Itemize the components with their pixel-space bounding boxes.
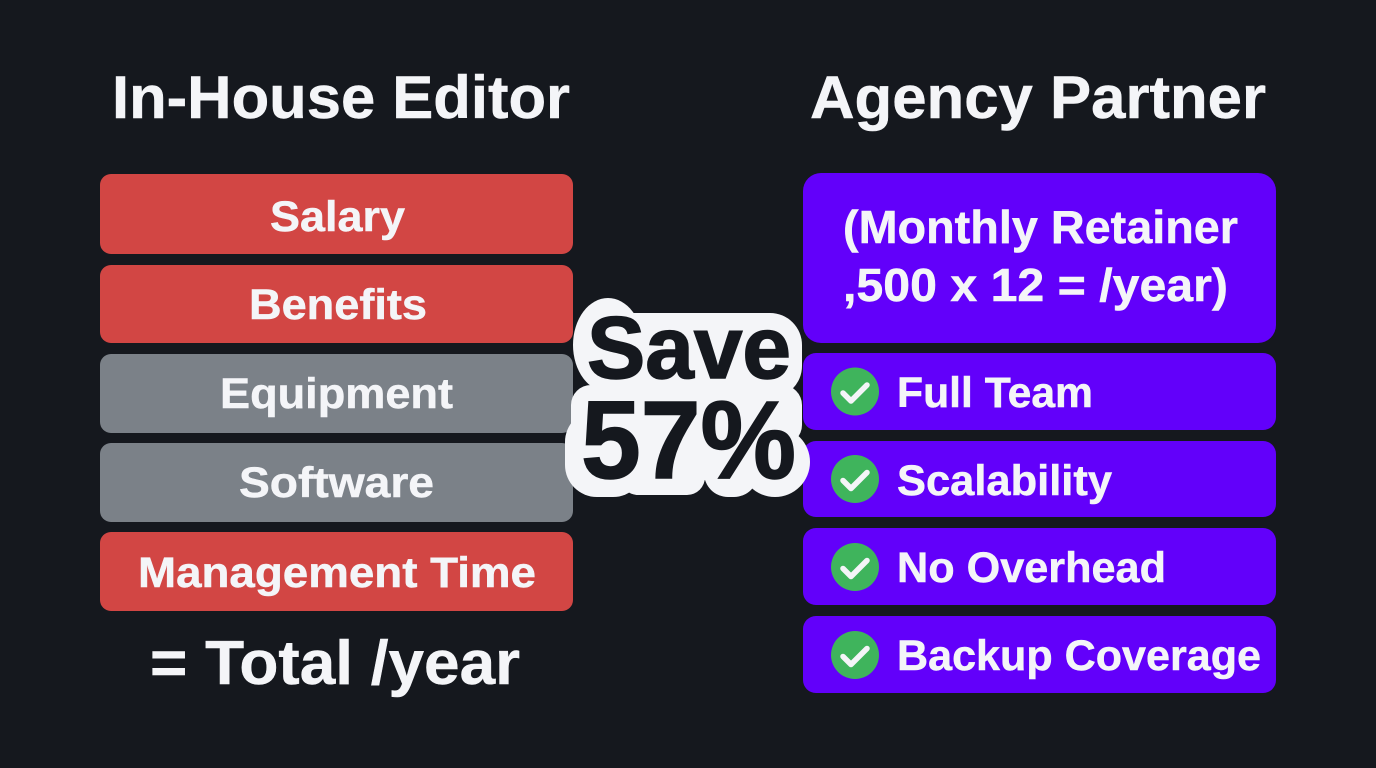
heading: In-House Editor: In-House Editor bbox=[112, 64, 570, 131]
cost bar: Equipment bbox=[100, 354, 573, 433]
cost bar: Software bbox=[100, 443, 573, 522]
cost bar: Management Time: Management Time bbox=[138, 549, 536, 597]
benefit bar: No Overhead: No Overhead bbox=[897, 544, 1166, 592]
benefit bar: Backup Coverage: Backup Coverage bbox=[897, 632, 1261, 680]
benefit bar: No Overhead bbox=[803, 528, 1276, 605]
icon: check bbox=[831, 631, 879, 679]
retainer box: ,500 x 12 = /year) bbox=[843, 259, 1228, 311]
retainer box: (Monthly Retainer bbox=[843, 201, 1238, 253]
sticker backing bbox=[565, 298, 810, 497]
cost bar: Salary bbox=[100, 174, 573, 254]
callout: Save 57% sticker bbox=[565, 298, 810, 502]
benefit bar: Full Team bbox=[803, 353, 1276, 430]
panel: in-house cost list bbox=[100, 174, 573, 611]
cost bar: Salary: Salary bbox=[270, 193, 405, 241]
benefit bar: Full Team: Full Team bbox=[897, 369, 1093, 417]
sticker text: Save: Save bbox=[587, 298, 791, 397]
icon: check bbox=[831, 455, 879, 503]
heading: Agency Partner: Agency Partner bbox=[810, 64, 1266, 131]
cost bar: Benefits bbox=[100, 265, 573, 343]
cost bar: Benefits: Benefits bbox=[249, 281, 427, 329]
benefit bar: Backup Coverage bbox=[803, 616, 1276, 693]
panel: agency partner list bbox=[803, 173, 1276, 693]
cost bar: Equipment: Equipment bbox=[220, 370, 453, 418]
icon: check bbox=[831, 543, 879, 591]
cost bar: Software: Software bbox=[239, 459, 434, 507]
icon: check bbox=[831, 368, 879, 416]
benefit bar: Scalability: Scalability bbox=[897, 457, 1112, 505]
benefit bar: Scalability bbox=[803, 441, 1276, 517]
retainer box bbox=[803, 173, 1276, 343]
total line: = Total /year bbox=[150, 629, 520, 698]
sticker text: 57%: 57% bbox=[581, 379, 796, 502]
cost bar: Management Time bbox=[100, 532, 573, 611]
